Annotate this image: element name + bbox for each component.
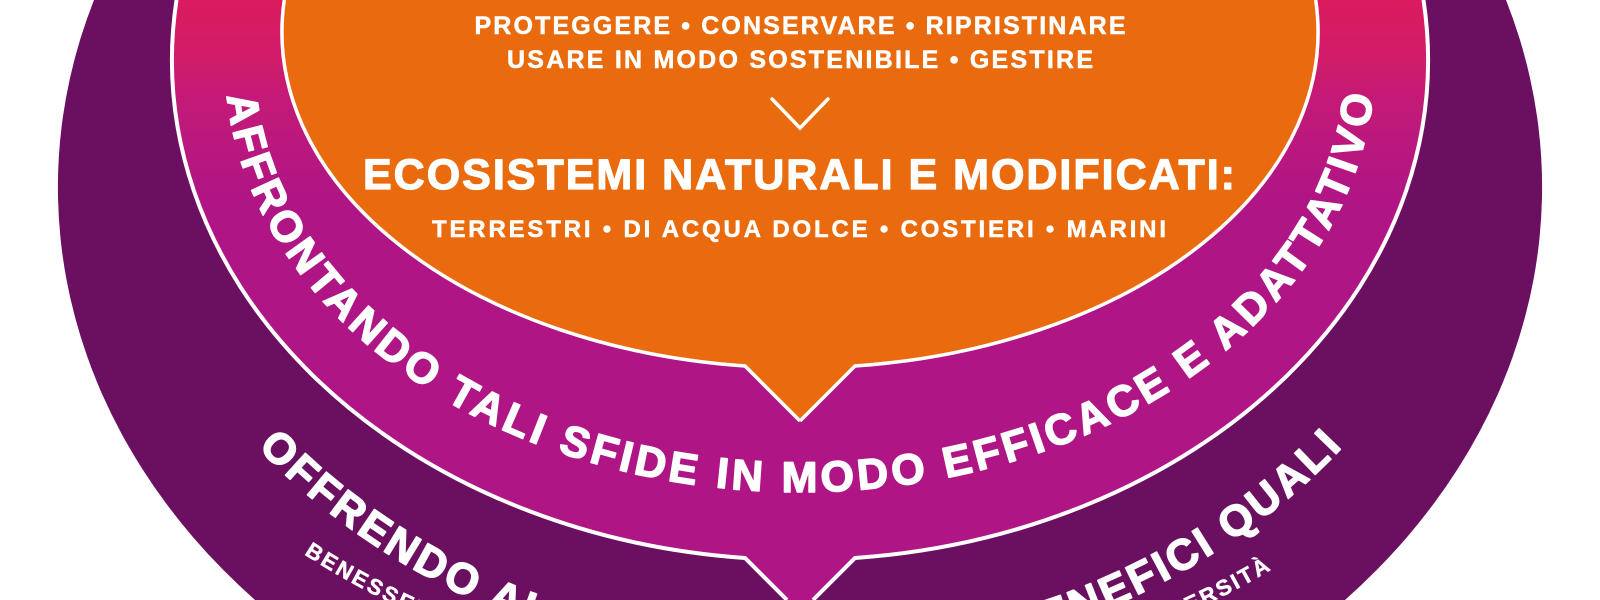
- icon: chevron arrow: [772, 99, 828, 128]
- text: actions line two: USARE IN MODO SOSTENIBILE • GESTIRE: [507, 46, 1093, 74]
- text: ecosystem types: TERRESTRI • DI ACQUA DOLCE • COSTIERI • MARINI: [432, 216, 1166, 243]
- panel: magenta ring bubble: [172, 0, 1428, 600]
- panel: orange core bubble: [282, 0, 1318, 421]
- text: actions line one: PROTEGGERE • CONSERVARE • RIPRISTINARE: [474, 12, 1126, 40]
- heading: natural and modified ecosystems: ECOSISTEMI NATURALI E MODIFICATI:: [363, 151, 1235, 199]
- curved text: addressing challenges: AFFRONTANDO TALI SFIDE IN MODO EFFICACE E ADATTATIVO: [226, 94, 1372, 493]
